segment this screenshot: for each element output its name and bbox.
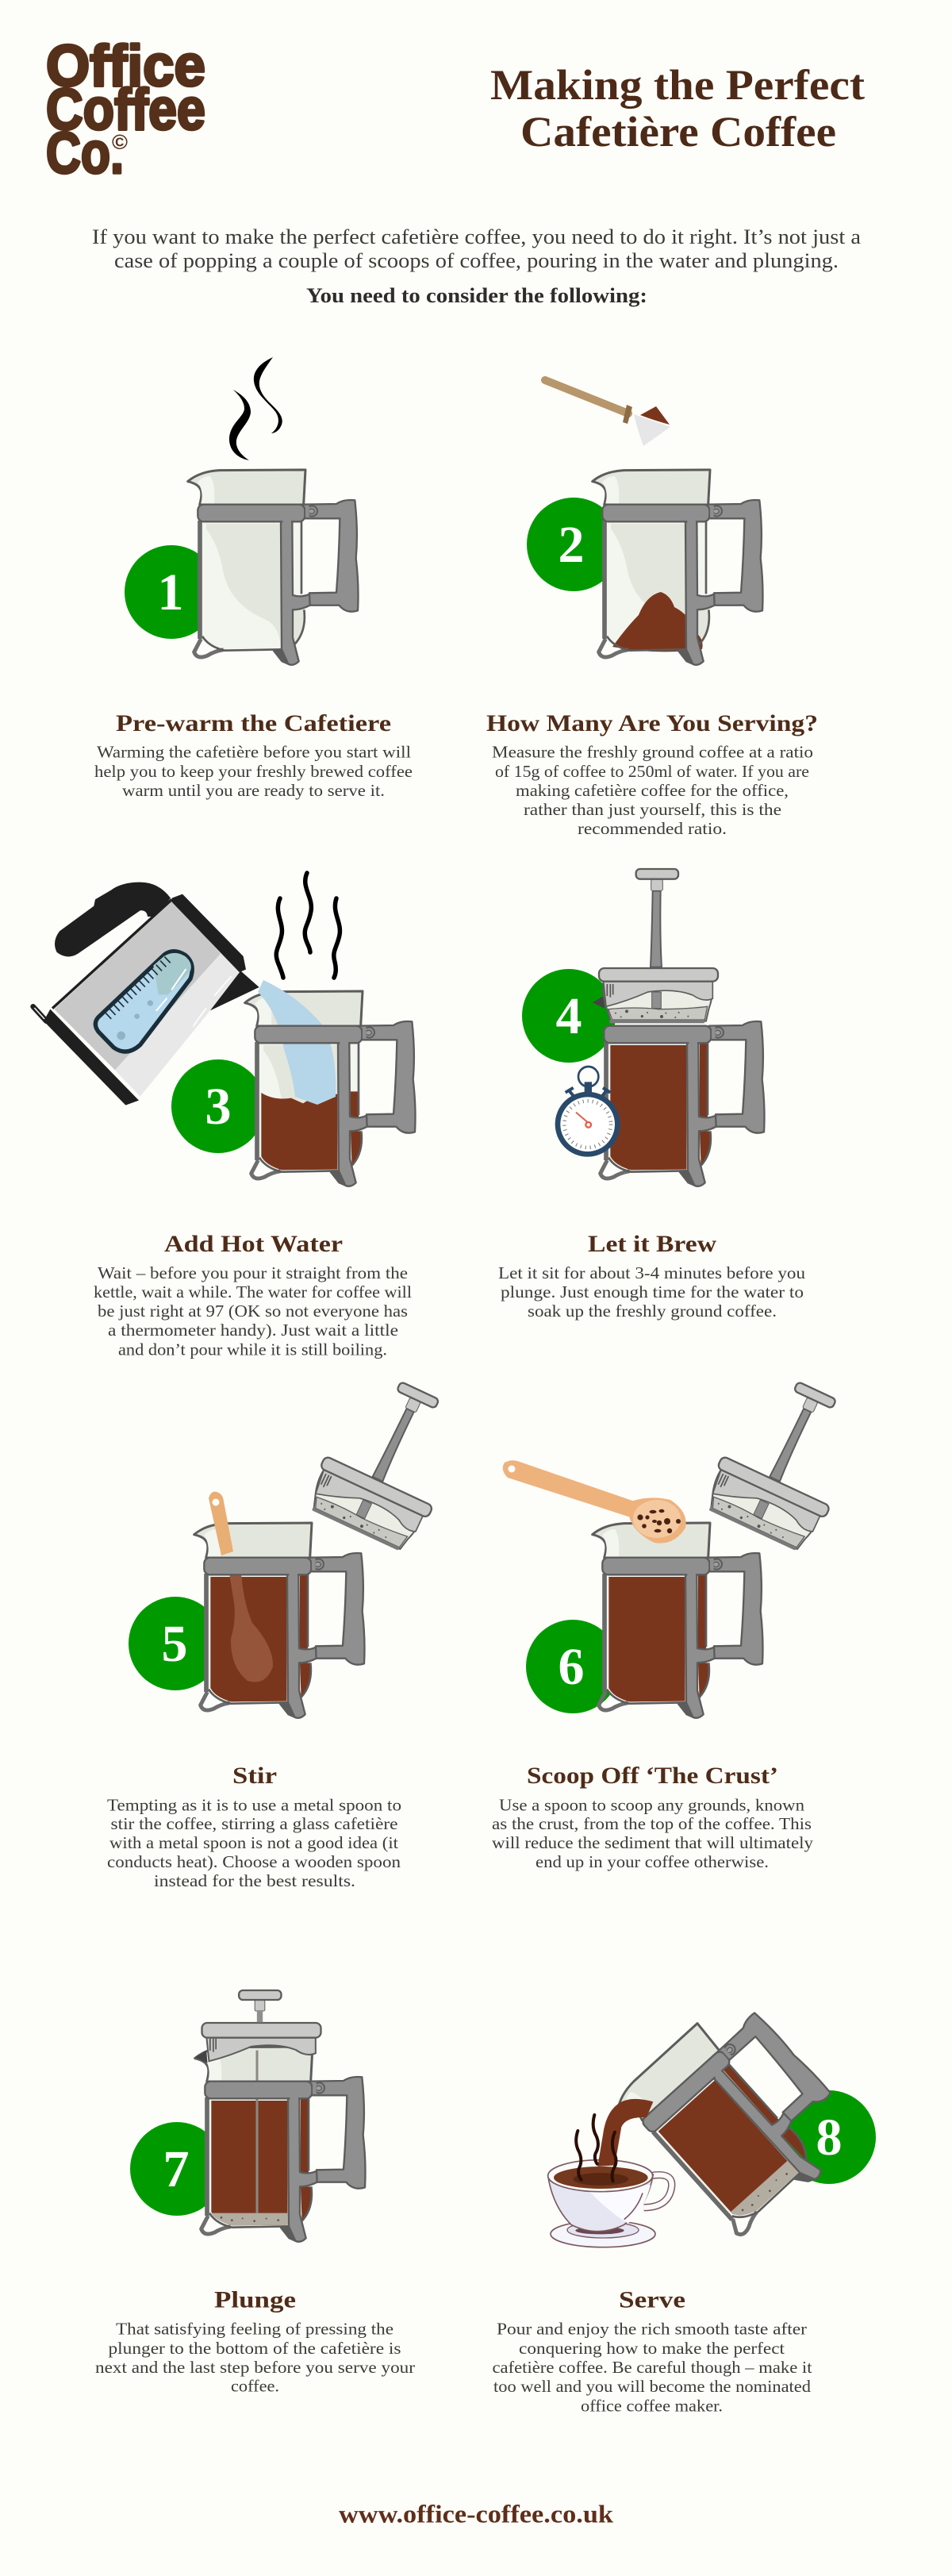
- step 5 text: with a metal spoon is not a good idea (it: [109, 1833, 398, 1852]
- step 1 text: warm until you are ready to serve it.: [122, 781, 385, 800]
- logo: Office Coffee Co.: Coffee: [46, 78, 205, 142]
- intro text: [92, 225, 861, 272]
- cafetiere filling: [245, 980, 415, 1186]
- title: Making the Perfect: [490, 61, 865, 109]
- step 6 text: will reduce the sediment that will ultimately: [492, 1833, 814, 1852]
- step 1 text: Warming the cafetière before you start will: [97, 743, 411, 762]
- icon: steam: [229, 357, 282, 460]
- icon: spoon with grounds: [503, 1460, 686, 1544]
- step 6 text: end up in your coffee otherwise.: [536, 1852, 769, 1871]
- step 8 text: cafetière coffee. Be careful though – make it: [492, 2358, 812, 2377]
- step 7 text: plunger to the bottom of the cafetière is: [108, 2339, 401, 2358]
- step 3 text: and don’t pour while it is still boiling.: [118, 1340, 387, 1359]
- number badge 1: [125, 545, 218, 639]
- step 5 text: stir the coffee, stirring a glass cafetière: [111, 1814, 398, 1833]
- logo: Office Coffee Co.: [46, 34, 205, 186]
- number badge 8: [782, 2090, 876, 2184]
- step 4 text: Let it Brew: [588, 1231, 716, 1257]
- step 3 text: be just right at 97 (OK so not everyone has: [98, 1301, 408, 1321]
- step 6 text: Use a spoon to scoop any grounds, known: [499, 1795, 805, 1814]
- step 8 text: conquering how to make the perfect: [519, 2339, 785, 2358]
- step 6 text: as the crust, from the top of the coffee. This: [492, 1814, 812, 1833]
- step 2 text: [486, 710, 818, 838]
- step 5 illustration: [129, 1366, 475, 1718]
- step 3 text: Wait – before you pour it straight from the: [98, 1263, 408, 1282]
- icon: coffee cup: [548, 2160, 672, 2247]
- step 2 text: of 15g of coffee to 250ml of water. If you are: [495, 762, 809, 781]
- step 6 illustration: [503, 1366, 873, 1718]
- number badge 4: 4: [555, 987, 582, 1045]
- step 5 text: Stir: [232, 1763, 277, 1789]
- number badge 6: 6: [559, 1638, 584, 1696]
- number badge 2: [527, 498, 620, 591]
- icon: coffee scoop: [545, 380, 670, 446]
- step 5 text: Tempting as it is to use a metal spoon to: [107, 1795, 401, 1814]
- footer url: www.office-coffee.co.uk: [339, 2500, 613, 2528]
- intro text: If you want to make the perfect cafetière coffee, you need to do it right. It’s not just a: [92, 225, 861, 248]
- step 3 text: [94, 1231, 412, 1359]
- step 8 text: too well and you will become the nominated: [493, 2377, 812, 2396]
- step 1 text: [94, 710, 413, 800]
- icon: steam: [576, 2115, 616, 2181]
- coffee stream: [597, 2099, 653, 2167]
- step 7 text: That satisfying feeling of pressing the: [116, 2319, 393, 2338]
- step 7 text: Plunge: [214, 2287, 296, 2313]
- number badge 6: [526, 1620, 620, 1713]
- step 3 text: kettle, wait a while. The water for coffee will: [94, 1282, 412, 1301]
- step 8 illustration: [548, 1988, 876, 2247]
- step 8 text: office coffee maker.: [581, 2397, 723, 2416]
- step 1 text: help you to keep your freshly brewed coffee: [94, 762, 413, 781]
- step 2 text: making cafetière coffee for the office,: [516, 781, 789, 800]
- spoon under coffee: [229, 1573, 273, 1682]
- intro text: case of popping a couple of scoops of coffee, pouring in the water and plunging.: [114, 249, 839, 272]
- cafetiere with grounds: [593, 470, 762, 665]
- number badge 5: 5: [162, 1615, 187, 1673]
- cafetiere: [593, 1523, 762, 1718]
- step 5 text: [107, 1763, 401, 1890]
- title: [490, 61, 865, 156]
- number badge 1: 1: [157, 563, 184, 621]
- step 4 text: [498, 1231, 806, 1321]
- number badge 3: [171, 1059, 265, 1153]
- water stream: [258, 980, 336, 1105]
- number badge 7: [130, 2122, 224, 2216]
- title: Cafetière Coffee: [520, 108, 836, 156]
- step 8 text: Serve: [619, 2287, 685, 2313]
- number badge 8: 8: [816, 2109, 843, 2167]
- number badge 5: [129, 1597, 222, 1690]
- step 6 text: Scoop Off ‘The Crust’: [527, 1763, 778, 1789]
- step 2 text: rather than just yourself, this is the: [524, 800, 781, 819]
- step 2 text: recommended ratio.: [578, 819, 727, 838]
- step 6 text: [492, 1763, 814, 1871]
- cafetiere plunged: [195, 1990, 365, 2242]
- cafetiere with spoon: [194, 1492, 364, 1718]
- number badge 7: 7: [163, 2140, 189, 2198]
- step 2 illustration: [527, 380, 762, 665]
- cafetiere empty: [188, 470, 358, 665]
- icon: wooden spoon handle: [209, 1492, 233, 1555]
- step 1 illustration: [125, 357, 358, 665]
- step 3 illustration: [33, 873, 415, 1186]
- subheading: You need to consider the following:: [306, 284, 647, 307]
- step 4 illustration: [522, 869, 764, 1186]
- icon: steam: [276, 873, 340, 978]
- cafetiere tilted pouring: [610, 1988, 867, 2247]
- plunger removed: [699, 1366, 873, 1556]
- number badge 4: [522, 969, 616, 1063]
- step 5 text: instead for the best results.: [154, 1871, 355, 1890]
- step 7 text: next and the last step before you serve your: [95, 2358, 415, 2377]
- icon: stopwatch: [555, 1067, 620, 1157]
- step 7 illustration: [130, 1990, 365, 2242]
- step 8 text: Pour and enjoy the rich smooth taste after: [497, 2319, 807, 2338]
- logo: Office Coffee Co.: Office: [46, 34, 205, 98]
- logo: Office Coffee Co.: ©: [112, 130, 128, 154]
- step 5 text: conducts heat). Choose a wooden spoon: [107, 1852, 401, 1871]
- step 8 text: [492, 2287, 812, 2416]
- icon: kettle: [33, 882, 259, 1105]
- step 2 text: How Many Are You Serving?: [486, 710, 818, 736]
- step 4 text: plunge. Just enough time for the water to: [501, 1282, 804, 1301]
- logo: Office Coffee Co.: Co.: [46, 121, 124, 186]
- plunger removed: [302, 1366, 475, 1556]
- number badge 3: 3: [205, 1078, 232, 1136]
- step 4 text: soak up the freshly ground coffee.: [528, 1301, 777, 1321]
- number badge 2: 2: [559, 516, 584, 574]
- step 7 text: coffee.: [231, 2376, 279, 2395]
- cafetiere with plunger raised: [593, 869, 764, 1186]
- step 3 text: Add Hot Water: [164, 1231, 343, 1257]
- step 4 text: Let it sit for about 3-4 minutes before you: [498, 1263, 806, 1282]
- step 3 text: a thermometer handy). Just wait a little: [108, 1321, 398, 1340]
- step 7 text: [95, 2287, 415, 2395]
- step 2 text: Measure the freshly ground coffee at a ratio: [492, 743, 813, 762]
- step 1 text: Pre-warm the Cafetiere: [116, 710, 391, 736]
